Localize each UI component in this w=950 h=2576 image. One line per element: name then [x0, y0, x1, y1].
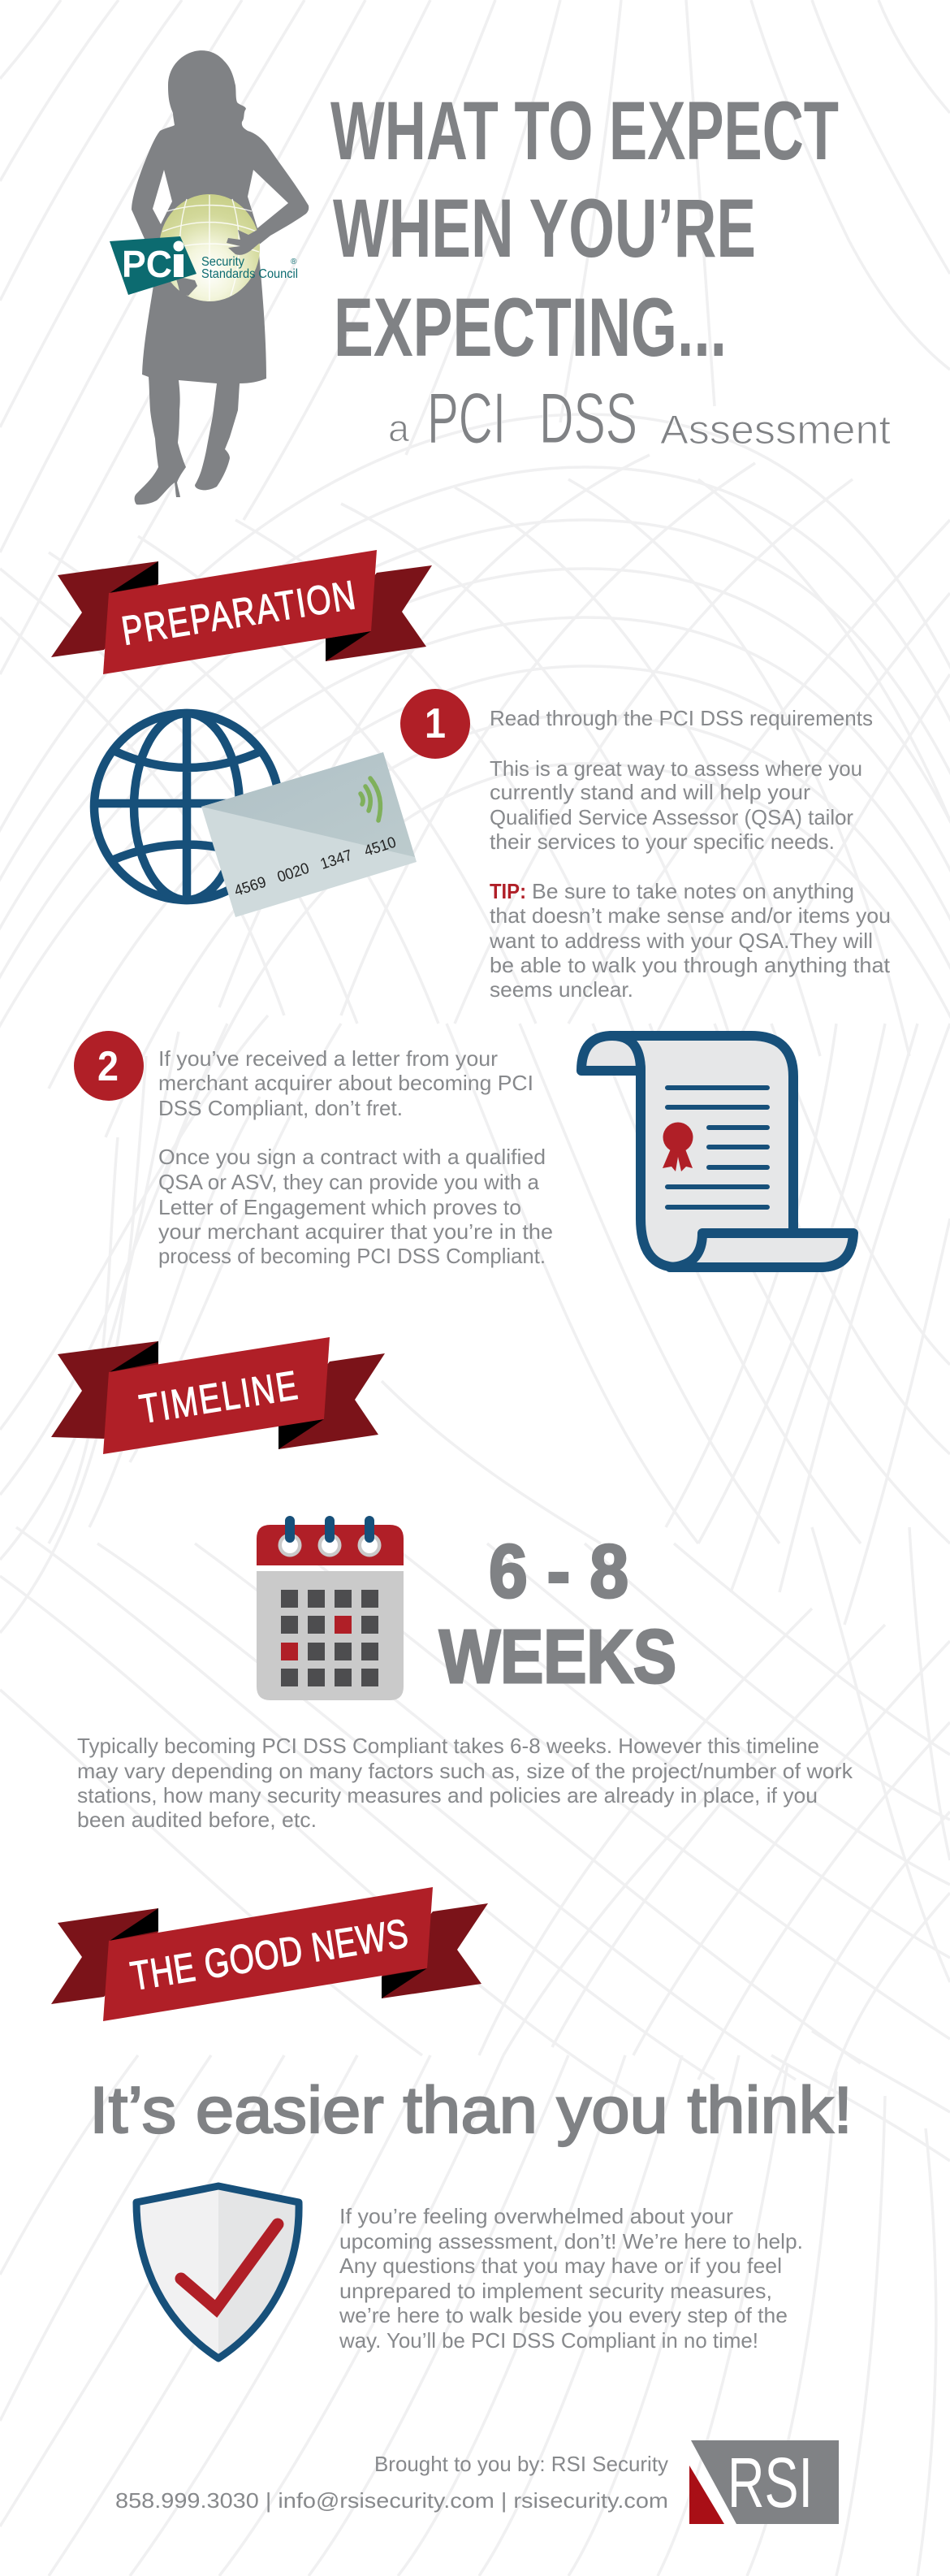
upper hand — [227, 227, 270, 255]
card number: 1347 — [318, 847, 355, 873]
step 2 text: DSS Compliant, don’t fret. — [158, 1096, 403, 1120]
RSI logo: RSI — [728, 2444, 813, 2522]
good news text: unprepared to implement security measures, — [339, 2279, 772, 2303]
step 1 text: be able to walk you through anything that — [490, 953, 891, 977]
PCI logo wordmark: Standards Council — [201, 267, 298, 281]
stat: 6 - 8 weeks: 6 - 8 — [489, 1529, 628, 1613]
number badge 2: 2 — [97, 1043, 119, 1090]
silhouette body — [132, 50, 309, 504]
icon: calendar — [257, 1521, 404, 1700]
title: WHEN YOU’RE — [333, 182, 756, 275]
wax seal — [663, 1123, 693, 1171]
icon: scroll certificate — [581, 1036, 853, 1267]
subtitle: a — [388, 407, 409, 449]
PCI logo badge: PC — [122, 243, 172, 285]
ribbon: preparation — [51, 550, 432, 674]
step 1 text: Qualified Service Assessor (QSA) tailor — [490, 805, 853, 829]
ribbon: the good news — [51, 1887, 488, 2021]
stat: 6 - 8 weeks: WEEKS — [439, 1614, 676, 1699]
PCI logo badge — [110, 236, 196, 295]
number badge 1: 1 — [425, 700, 446, 747]
step 1 text: currently stand and will help your — [490, 780, 810, 804]
ribbon label: THE GOOD NEWS — [127, 1910, 411, 1999]
timeline text: been audited before, etc. — [77, 1808, 317, 1832]
PCI logo wordmark: ® — [291, 258, 297, 266]
PCI globe — [159, 194, 260, 301]
step 2 text: QSA or ASV, they can provide you with a — [158, 1170, 540, 1194]
subtitle — [388, 378, 891, 458]
step 2 text: If you’ve received a letter from your — [158, 1046, 498, 1071]
step 2 text: merchant acquirer about becoming PCI — [158, 1071, 533, 1095]
step 1 text: that doesn’t make sense and/or items you — [490, 903, 891, 928]
PCI logo wordmark: Security — [201, 255, 244, 269]
ribbon: timeline — [51, 1337, 385, 1454]
woman silhouette with PCI logo — [110, 50, 309, 504]
subtitle: Assessment — [660, 407, 891, 452]
timeline text: Typically becoming PCI DSS Compliant takes 6-8 weeks. However this timeline — [77, 1734, 819, 1758]
number badge 1 — [400, 689, 470, 759]
good news text: upcoming assessment, don’t! We’re here to help. — [339, 2229, 803, 2253]
ribbon label: PREPARATION — [119, 571, 358, 654]
card number: 0020 — [275, 860, 312, 886]
card number: 4510 — [362, 834, 399, 860]
icon: shield with check — [136, 2186, 299, 2358]
heading: easier than you think: It’s easier than you think! — [89, 2074, 853, 2147]
ribbon label: TIMELINE — [136, 1362, 300, 1432]
title: EXPECTING... — [334, 281, 727, 374]
footer credit: Brought to you by: RSI Security — [374, 2452, 668, 2476]
step 2 text: Letter of Engagement which proves to — [158, 1195, 521, 1219]
step 2 text — [158, 1046, 553, 1268]
good news text: If you’re feeling overwhelmed about your — [339, 2204, 733, 2228]
step 1 text: want to address with your QSA.They will — [489, 929, 873, 953]
stat: 6 - 8 weeks — [439, 1529, 676, 1699]
subtitle: PCI — [427, 378, 506, 458]
contactless symbol — [361, 778, 380, 820]
footer credit: 858.999.3030 | info@rsisecurity.com | rsisecurity.com — [115, 2488, 668, 2513]
step 1 text — [489, 706, 891, 1002]
step 2 text: your merchant acquirer that you’re in the — [158, 1219, 553, 1244]
timeline text: stations, how many security measures and policies are already in place, if you — [77, 1783, 818, 1808]
step 2 text: Once you sign a contract with a qualified — [158, 1145, 546, 1169]
good news text — [339, 2204, 803, 2353]
good news text: way. You’ll be PCI DSS Compliant in no time! — [339, 2328, 758, 2353]
RSI logo — [689, 2440, 839, 2524]
icon: globe — [94, 713, 279, 900]
step 1 text: Read through the PCI DSS requirements — [490, 706, 873, 730]
number badge 2 — [74, 1031, 144, 1101]
step 1 text: Be sure to take notes on anything — [532, 879, 854, 903]
good news text: Any questions that you may have or if you feel — [339, 2253, 782, 2278]
card number: 4569 — [232, 874, 269, 900]
subtitle: DSS — [539, 378, 637, 458]
lower hand — [175, 276, 197, 296]
PCI logo wordmark — [201, 255, 298, 281]
card number — [232, 834, 399, 900]
icon: credit card — [201, 752, 417, 917]
good news text: we’re here to walk beside you every step of the — [339, 2303, 788, 2327]
step 2 text: process of becoming PCI DSS Compliant. — [158, 1244, 546, 1268]
step 1 text: seems unclear. — [490, 977, 633, 1002]
step 1 text: This is a great way to assess where you — [490, 756, 862, 781]
title — [330, 84, 839, 374]
timeline text: may vary depending on many factors such as, size of the project/number of work — [77, 1759, 853, 1783]
step 1 text: TIP: — [490, 879, 526, 903]
timeline text — [77, 1734, 853, 1832]
footer credit — [115, 2452, 668, 2513]
step 1 text: their services to your specific needs. — [490, 829, 835, 854]
